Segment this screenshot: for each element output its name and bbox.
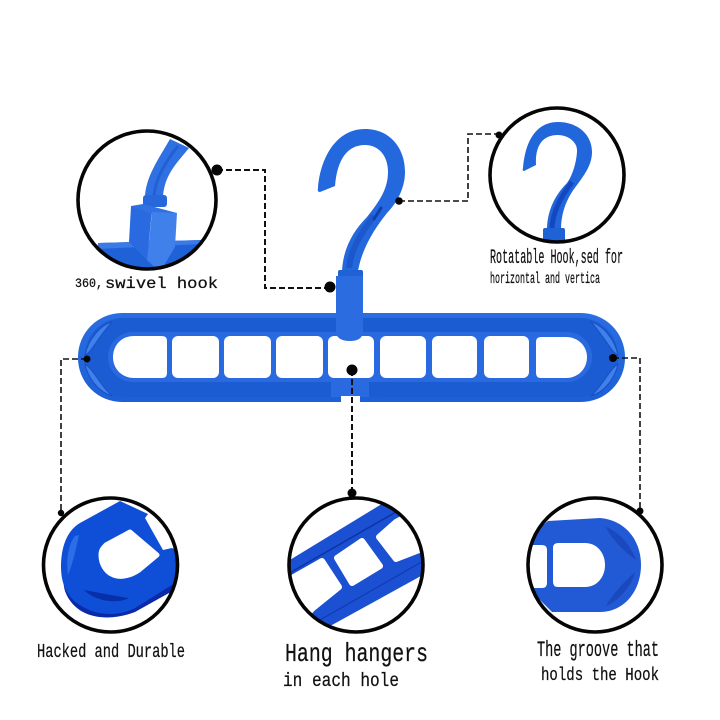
main hanger product [78, 129, 625, 403]
label: the groove [537, 638, 659, 686]
callout line: left end [58, 356, 90, 516]
detail circle: groove [520, 498, 662, 632]
detail circle: hacked and durable [44, 498, 180, 632]
label: hang hangers: in each hole [283, 670, 399, 692]
callout line: centre hole [346, 364, 358, 498]
label: rotatable hook: horizontal and vertica [490, 270, 600, 288]
label: hang hangers [283, 639, 428, 692]
label: rotatable hook [490, 247, 623, 288]
label: the groove: holds the Hook [541, 666, 659, 686]
callout line: right end [609, 354, 644, 514]
callout line: swivel hook [212, 164, 336, 292]
label: hang hangers: Hang hangers [285, 639, 428, 669]
detail circle: swivel hook [78, 131, 216, 275]
label: hacked and durable: Hacked and Durable [37, 641, 185, 663]
callout line: rotatable hook [395, 132, 502, 205]
label: 360 swivel hook: 360, [75, 276, 103, 291]
detail circle: hang hangers [287, 496, 425, 634]
detail circle: rotatable hook [490, 108, 624, 244]
holes [113, 336, 587, 403]
label: 360 swivel hook: swivel hook [105, 275, 218, 293]
swivel hook [318, 129, 405, 341]
hanger bar [78, 313, 625, 403]
